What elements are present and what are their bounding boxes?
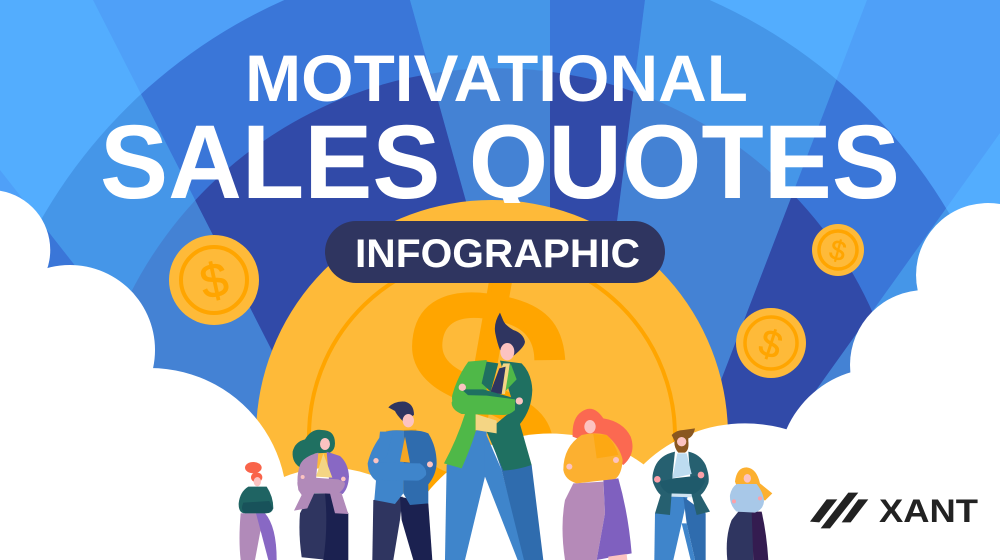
logo: XANT: XANT [879,493,979,529]
person: red-haired woman [239,462,277,560]
subtitle pill: INFOGRAPHIC [355,232,640,276]
title line 1: MOTIVATIONAL [245,41,748,115]
person: bearded man [652,428,710,560]
coin lower right [736,308,806,378]
title line 2: SALES QUOTES [100,104,900,221]
coin lower right: $ [754,322,787,368]
person: purple jacket woman [293,430,349,560]
coin left [169,235,259,325]
large gold coin [256,200,728,560]
subtitle pill [325,221,665,283]
coin left: $ [196,253,233,310]
person: blonde woman [727,467,772,560]
person: green jacket man [444,313,543,560]
clouds [0,191,1000,560]
coin top right: $ [826,233,850,268]
person: blue jacket man [368,402,437,560]
person: orange sweater woman [562,409,633,560]
coin top right [812,224,864,276]
background: concentric sunburst [0,0,1000,430]
logo: XANT [810,493,979,529]
